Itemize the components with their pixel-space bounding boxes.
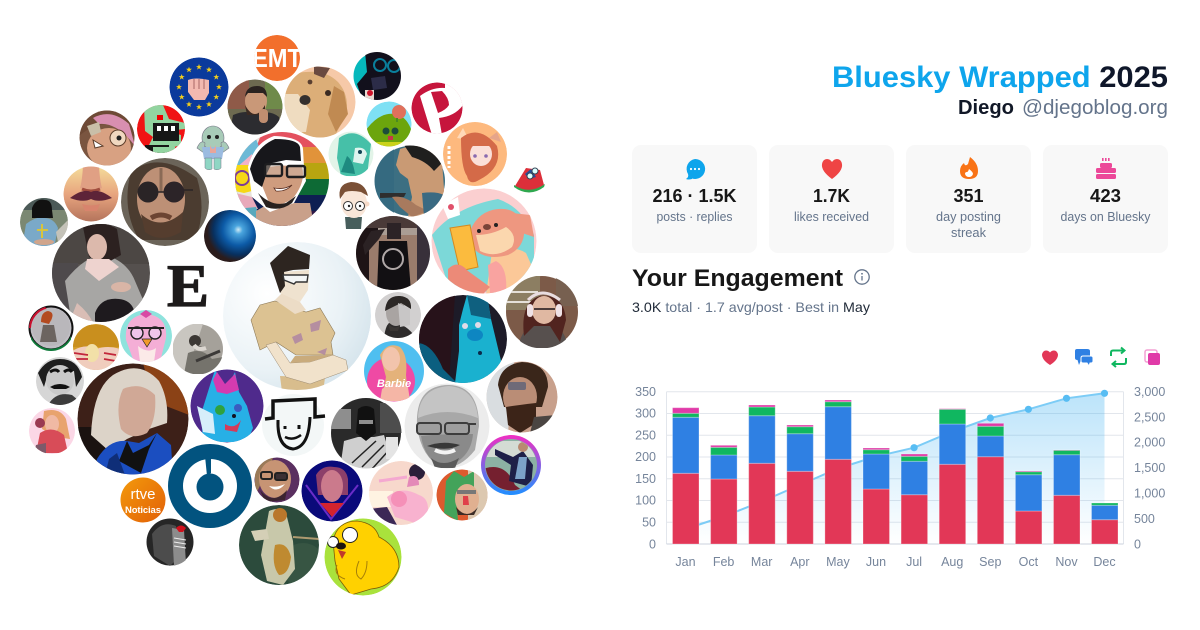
right axis labels: 1,500 <box>1134 461 1165 475</box>
sticker: watermelon <box>514 168 545 192</box>
right axis labels: 500 <box>1134 512 1155 526</box>
avatar: woman aiming gun <box>374 143 446 217</box>
avatar: RTVE Noticias logo: Noticias <box>125 505 161 516</box>
avatar: fresco of flora <box>239 505 325 587</box>
bar: Dec <box>1092 503 1118 544</box>
stat card: day posting streak: day posting <box>936 210 1001 224</box>
month labels: Sep <box>979 555 1001 569</box>
icon: reposts legend <box>1111 348 1126 367</box>
avatar: cartoon man on rainbow flag <box>235 132 329 226</box>
stat card: posts and replies: 216 · 1.5K <box>652 186 736 206</box>
stat card: likes received: likes received <box>794 210 869 224</box>
avatar: Barbie poster <box>364 341 424 405</box>
month labels: Dec <box>1093 555 1116 569</box>
bar: Jul <box>901 454 928 544</box>
avatar: Groucho photo <box>36 357 84 405</box>
avatar: EMT logo: EMT <box>252 43 302 73</box>
month labels <box>675 555 1116 569</box>
engagement summary: 3.0K total · 1.7 avg/post · Best in May <box>632 299 870 315</box>
icon avatar: cartoon boy with glasses <box>339 182 370 229</box>
right axis labels: 2,500 <box>1134 410 1165 424</box>
user name and handle: @djegoblog.org <box>1022 97 1168 119</box>
bar: Feb <box>711 445 737 544</box>
stat card: likes received: 1.7K <box>813 186 850 206</box>
icon: chat bubble <box>686 159 705 180</box>
stat card: likes received <box>769 145 894 253</box>
avatar: blonde girl in pink <box>29 408 75 454</box>
avatar: bald man in glasses (greyscale) <box>404 384 490 468</box>
avatar: furby illustration <box>120 310 172 362</box>
stat card: posts and replies <box>632 145 757 253</box>
right axis labels: 0 <box>1134 537 1141 551</box>
avatar: E logo: E <box>167 253 209 319</box>
month labels: Aug <box>941 555 963 569</box>
stat card: posts and replies: posts · replies <box>656 210 732 224</box>
avatar: teal bearded sketch <box>328 132 374 176</box>
cumulative line <box>686 393 1104 529</box>
user name and handle <box>958 97 1168 119</box>
avatar: doodle face with hat <box>262 394 325 456</box>
avatar cluster <box>20 35 580 596</box>
right axis labels: 3,000 <box>1134 385 1165 399</box>
avatar: long-haired man in sunglasses <box>121 158 209 246</box>
avatar: black and white dark figure <box>146 518 194 566</box>
month labels: Mar <box>751 555 772 569</box>
icon avatar: cthulhu sticker <box>197 126 229 170</box>
month labels: Oct <box>1019 555 1039 569</box>
avatar: mustache close-up <box>64 166 118 222</box>
icon: likes legend <box>1042 350 1058 365</box>
stacked bars <box>672 400 1118 544</box>
stat card: day posting streak: streak <box>951 226 987 240</box>
avatar: synthwave roman bust <box>302 460 362 522</box>
user name and handle: Diego <box>958 97 1014 119</box>
left axis labels: 0 <box>649 537 656 551</box>
avatar: green-hooded elf <box>436 469 488 521</box>
avatar: otter with phone <box>432 188 536 297</box>
bar: Jun <box>863 448 890 544</box>
combined bar and area chart <box>635 385 1165 569</box>
month labels: Apr <box>790 555 810 569</box>
avatar: Barbie poster: Barbie <box>377 378 411 390</box>
month labels: Jun <box>866 555 886 569</box>
stat card: days on Bluesky: days on Bluesky <box>1060 210 1151 224</box>
gridlines <box>666 392 1124 544</box>
avatar: pixel dinosaur <box>137 105 185 153</box>
right axis labels: 1,000 <box>1134 486 1165 500</box>
bar: Nov <box>1054 450 1080 544</box>
avatar: man in black tank top <box>356 216 430 291</box>
avatar: engraved toga man <box>331 398 402 469</box>
avatar: Jake the Dog <box>324 518 402 596</box>
avatar: E logo <box>153 251 223 321</box>
cumulative area <box>686 393 1104 544</box>
avatar: blue fox character <box>190 370 264 442</box>
bar: Apr <box>787 425 813 544</box>
heading: Your Engagement: Your Engagement <box>632 265 843 292</box>
left axis labels: 300 <box>635 407 656 421</box>
chart legend icons <box>1042 348 1160 367</box>
bar: May <box>825 400 851 544</box>
left axis labels: 50 <box>642 516 656 530</box>
avatar: EU fist <box>170 58 228 116</box>
bar: Oct <box>1015 471 1042 544</box>
avatar: blue orb <box>204 210 256 262</box>
cumulative points <box>910 390 1108 451</box>
left axis labels <box>635 385 656 551</box>
month labels: May <box>826 555 850 569</box>
left axis labels: 100 <box>635 494 656 508</box>
avatar: Steven Universe scene <box>369 461 433 525</box>
month labels: Jan <box>675 555 696 569</box>
month labels: Nov <box>1055 555 1078 569</box>
avatar: P logo <box>412 82 462 134</box>
left axis labels: 350 <box>635 385 656 399</box>
month labels: Feb <box>713 555 734 569</box>
avatar: Vader with glasses <box>354 52 403 102</box>
icon: info <box>855 270 869 284</box>
avatar: RTVE Noticias logo <box>120 478 166 522</box>
right axis labels <box>1134 385 1165 551</box>
avatar: redhead anime on orange <box>443 122 507 186</box>
avatar: blonde woman in blue shirt <box>77 363 189 475</box>
avatar: bearded man with forehead note <box>486 361 558 433</box>
avatar: ring-framed man in jacket <box>481 435 541 495</box>
icon: cake <box>1096 158 1116 179</box>
stat card: days on Bluesky <box>1043 145 1168 253</box>
avatar: golden dog <box>284 66 356 138</box>
avatar: greyscale woman lying down <box>173 324 223 374</box>
avatar: hands holding cup <box>72 324 120 371</box>
avatar: man hiding half his face <box>375 292 421 338</box>
stat card: day posting streak: 351 <box>954 186 984 206</box>
avatar: blue ring logo <box>168 444 252 528</box>
icon: heart <box>822 159 842 179</box>
avatar: laughing man with glasses <box>254 458 300 502</box>
month labels: Jul <box>906 555 922 569</box>
left axis labels: 250 <box>635 428 656 442</box>
bar: Jan <box>672 408 699 544</box>
icon: quotes legend <box>1145 350 1160 365</box>
avatar: man with hand on chin <box>228 80 282 134</box>
heading: Bluesky Wrapped 2025: Bluesky Wrapped 2025 <box>832 61 1168 94</box>
stat card: day posting streak <box>906 145 1031 253</box>
left axis labels: 200 <box>635 450 656 464</box>
left axis labels: 150 <box>635 472 656 486</box>
avatar: pink cap cartoon <box>79 110 135 168</box>
right axis labels: 2,000 <box>1134 436 1165 450</box>
avatar: Vader mask man at laptop <box>20 198 68 248</box>
avatar: woman in grey sweater <box>52 222 150 323</box>
avatar: main profile illustration <box>223 242 371 392</box>
icon: flame <box>960 157 978 179</box>
bar: Mar <box>749 405 775 544</box>
icon: replies legend <box>1075 349 1093 366</box>
stat card: days on Bluesky: 423 <box>1090 186 1121 206</box>
bar: Aug <box>939 409 966 544</box>
avatar: woman with cat headphones <box>506 276 580 348</box>
avatar: red-haired woman mirror selfie <box>28 306 74 351</box>
avatar: RTVE Noticias logo: rtve <box>130 486 156 503</box>
avatar: blue genie <box>419 295 507 383</box>
avatar: green bush with glasses <box>366 102 412 147</box>
bar: Sep <box>977 423 1004 544</box>
avatar: EMT logo <box>252 35 302 81</box>
